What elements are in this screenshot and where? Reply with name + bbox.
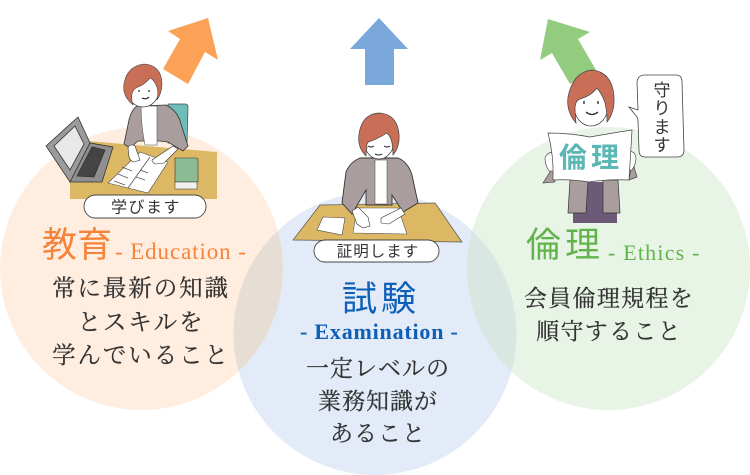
laptop	[46, 117, 113, 182]
text: ethics description: 順守すること	[536, 318, 682, 344]
text: examination description: 一定レベルの	[306, 356, 450, 381]
illustration: woman taking exam	[293, 113, 462, 262]
heading: ethics: - Ethics -	[608, 240, 701, 265]
label: 学びます: 学びます	[111, 194, 181, 218]
speech bubble: ま	[654, 113, 670, 138]
heading: ethics: 倫理	[526, 217, 604, 268]
label: 証明します	[314, 240, 439, 262]
jacket	[342, 158, 418, 214]
exam paper	[353, 208, 407, 234]
arrow: blue	[350, 18, 408, 85]
speech bubble	[629, 75, 684, 157]
text: examination description: あること	[330, 421, 426, 446]
arrow: orange	[163, 18, 218, 84]
arrow: green	[540, 19, 596, 84]
heading: education: - Education -	[115, 239, 247, 264]
circle: ethics	[467, 127, 750, 410]
heading: examination	[300, 271, 459, 344]
sign: 倫理	[559, 136, 623, 176]
text: education description	[52, 276, 230, 369]
heading: examination: 試験	[342, 271, 420, 322]
hands	[545, 152, 636, 171]
label: 学びます	[84, 194, 206, 218]
label: 証明します: 証明します	[337, 240, 419, 262]
green book	[175, 158, 198, 189]
head	[364, 123, 394, 159]
overlap: education and examination	[234, 230, 283, 371]
illustration: woman studying at desk	[46, 64, 217, 218]
hair	[124, 64, 162, 105]
circle: examination	[234, 192, 516, 475]
head	[574, 86, 608, 126]
hair	[568, 70, 614, 123]
heading: examination: - Examination -	[300, 319, 459, 344]
overlap: examination and ethics	[467, 231, 516, 371]
text: education description: 学んでいること	[52, 343, 230, 369]
text: education description: 常に最新の知識	[52, 276, 230, 302]
shirt	[141, 106, 157, 145]
text: examination description: 業務知識が	[318, 388, 438, 414]
jacket and trousers	[543, 160, 637, 223]
speech bubble: す	[654, 131, 670, 156]
text: examination description	[306, 356, 450, 446]
open notebook	[108, 152, 168, 193]
text: ethics description: 会員倫理規程を	[524, 286, 694, 311]
desk	[293, 203, 462, 242]
text: education description: とスキルを	[78, 310, 204, 336]
illustration: woman holding ethics sign	[543, 70, 684, 223]
exam hands	[352, 207, 405, 228]
face	[368, 146, 390, 155]
heading: education: 教育	[42, 217, 112, 268]
text: ethics description	[524, 286, 694, 344]
small book	[317, 217, 345, 235]
sign	[548, 130, 632, 182]
face	[139, 90, 149, 99]
speech bubble: 守	[654, 76, 670, 101]
chair	[168, 104, 188, 143]
desk	[70, 141, 217, 199]
hair	[359, 113, 399, 156]
face	[584, 101, 598, 114]
shirt	[375, 160, 387, 204]
circle: education	[0, 127, 283, 410]
speech bubble: り	[654, 94, 670, 119]
arms and hands	[128, 145, 178, 164]
jacket	[124, 105, 188, 151]
heading: education	[42, 217, 247, 268]
heading: ethics	[526, 217, 701, 268]
head	[127, 73, 159, 107]
